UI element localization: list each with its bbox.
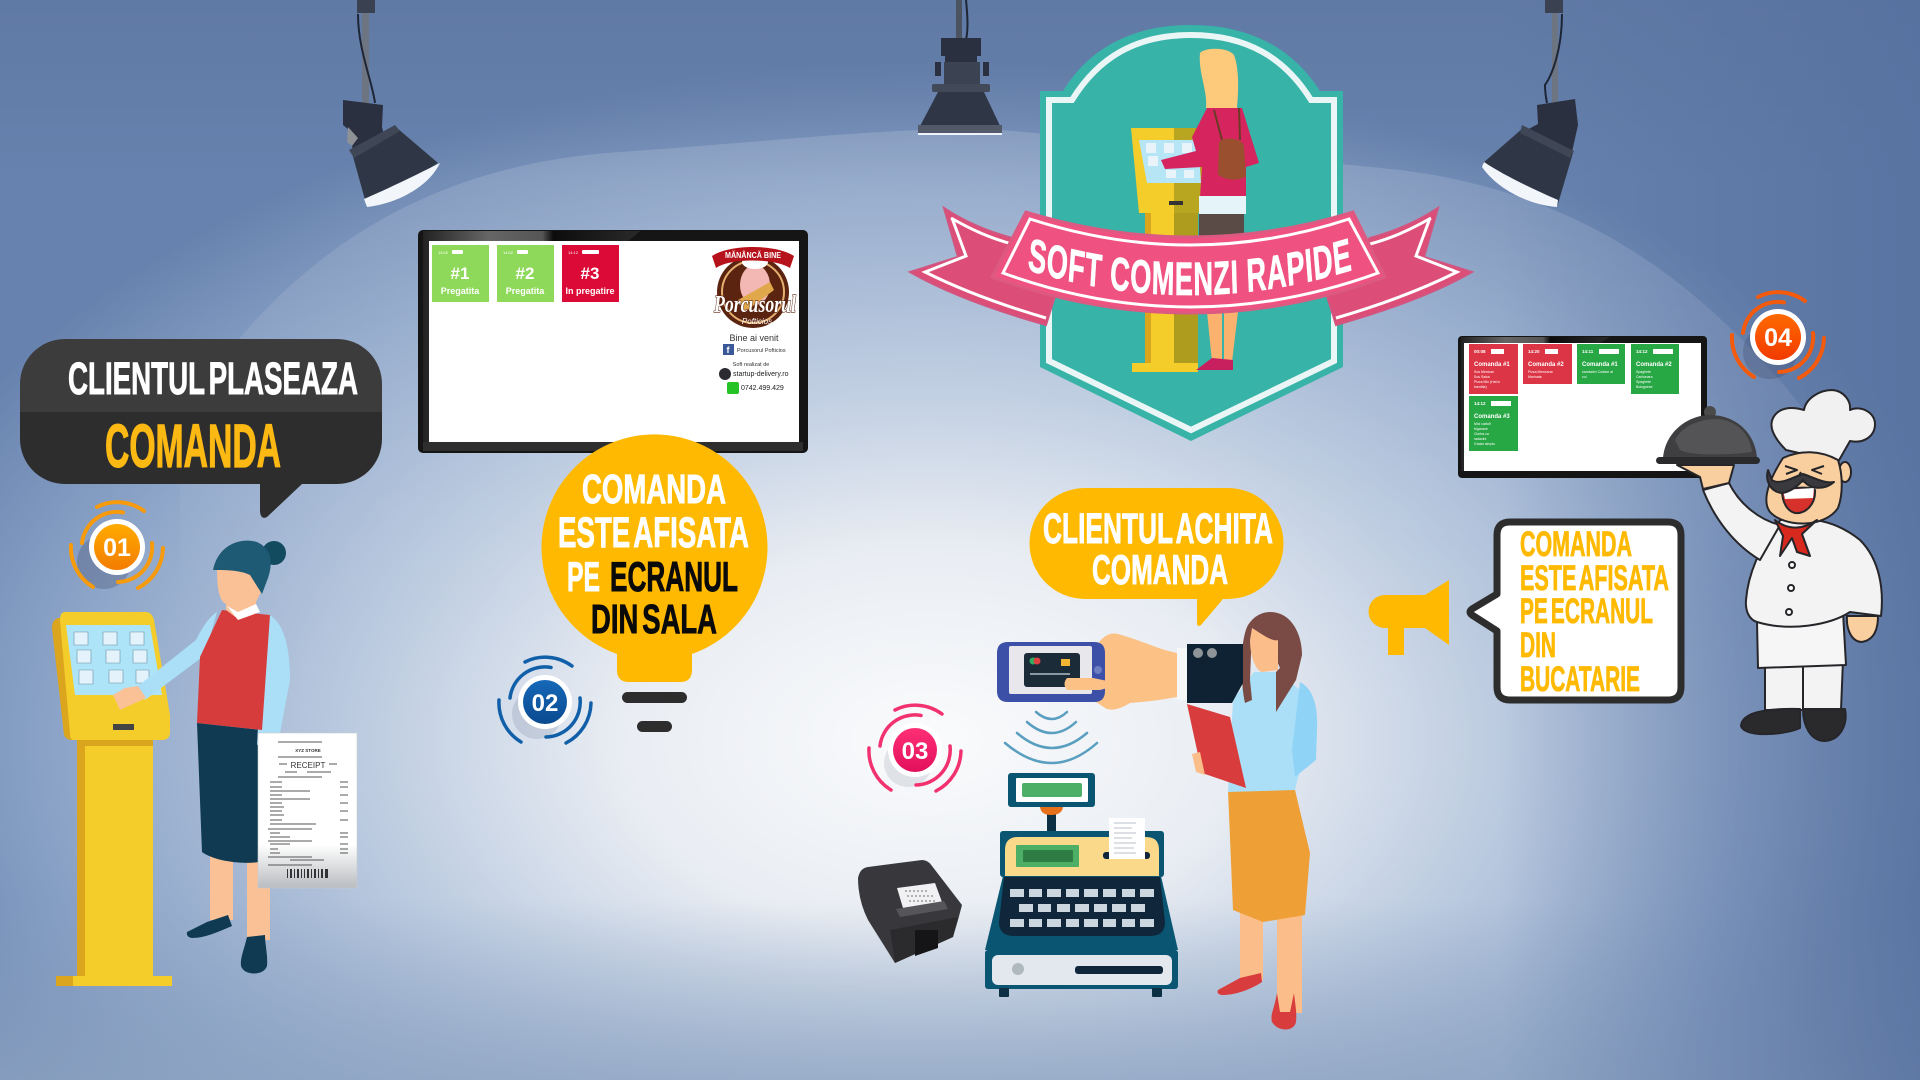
spotlight: left [343, 0, 440, 207]
mini woman from behind [1161, 49, 1259, 370]
kitchen ticket 4: Spaghete [1636, 370, 1651, 374]
lightbulb callout [542, 434, 767, 732]
bulb text [558, 466, 749, 642]
kitchen text: BUCATARIE [1520, 660, 1640, 699]
spotlight: center [918, 0, 1002, 135]
chef mustache [1767, 470, 1834, 493]
step badge 02: 02 [532, 690, 558, 717]
bulb base bars [622, 692, 687, 732]
kitchen ticket 5: Gratar simplu [1474, 442, 1495, 446]
phone [997, 642, 1105, 702]
kitchen ticket 3: sandwich Cuisine al [1582, 370, 1613, 374]
order card 3 [562, 245, 619, 302]
order card 1: #1 [451, 264, 469, 283]
kitchen ticket 2: Pizza Mexicana [1528, 370, 1553, 374]
kitchen ticket 5: Mici cartofi [1474, 422, 1491, 426]
monitor: dining room screen [418, 230, 808, 453]
kitchen ticket 3: 14:11 [1582, 349, 1594, 354]
contactless waves [1005, 712, 1097, 763]
kitchen ticket 5: Comanda #3 [1474, 414, 1510, 420]
welcome info: Porcusorul Pofticios [737, 348, 786, 354]
kitchen ticket 1: Sos Mexican [1474, 370, 1494, 374]
payment text: CLIENTUL ACHITA [1043, 505, 1273, 553]
kitchen ticket 5: radacini [1474, 437, 1486, 441]
welcome info [719, 333, 789, 394]
heading line 1: CLIENTUL PLASEAZA [68, 353, 358, 404]
receipt: XYZ STORE [295, 748, 321, 753]
kitchen ticket 5: 14:12 [1474, 401, 1486, 406]
spotlight: right [1482, 0, 1578, 207]
shield badge with title [908, 25, 1474, 441]
restaurant logo: Porcusorul [713, 292, 796, 318]
bulb text: DIN SALA [591, 596, 717, 642]
title: SOFT COMENZI RAPIDE [1028, 238, 1352, 296]
kitchen ticket 4 [1631, 344, 1679, 394]
shield background [1040, 25, 1343, 441]
order card 3: #3 [581, 264, 599, 283]
welcome info: Bine ai venit [729, 333, 779, 343]
arm holding phone [997, 634, 1243, 710]
kitchen ticket 3 [1577, 344, 1625, 384]
restaurant logo: MĂNÂNCĂ BINE [725, 251, 782, 260]
step badge 04: 04 [1764, 324, 1792, 352]
kitchen text: ESTE AFISATA [1520, 559, 1669, 598]
chef hand up [1677, 465, 1734, 489]
serving cloche [1656, 406, 1760, 464]
ribbon right tail [1322, 208, 1472, 325]
chef neckerchief [1775, 520, 1817, 556]
restaurant logo: Pofticios [742, 317, 772, 326]
step badge 04 [1732, 292, 1824, 379]
step badge 03 [869, 705, 961, 791]
monitor: kitchen screen [1458, 336, 1707, 478]
kitchen ticket 2 [1523, 344, 1572, 384]
chef jacket [1746, 520, 1882, 627]
bulb text: PE [567, 553, 600, 600]
bulb text: COMANDA [582, 466, 726, 512]
step badge 01: 01 [103, 534, 131, 562]
order card 2: #2 [516, 264, 534, 283]
bubble: client pays: COMANDA [1092, 546, 1228, 593]
kitchen ticket 4: Comanda #2 [1636, 362, 1672, 368]
chef eyes and nose [1785, 466, 1824, 482]
order card 1: Pregatita [441, 286, 480, 296]
order card 1 [432, 245, 489, 302]
cash register [985, 773, 1178, 997]
kitchen ticket 1 [1469, 344, 1518, 394]
chef hand down [1847, 616, 1878, 642]
bubble: client pays [1030, 488, 1284, 626]
kitchen text: PE ECRANUL [1520, 592, 1653, 631]
megaphone icon [1369, 580, 1449, 655]
ribbon left tail [910, 208, 1060, 325]
kitchen ticket 5 [1469, 396, 1518, 451]
order card 2 [497, 245, 554, 302]
heading line 2: COMANDA [105, 412, 281, 480]
chef head [1766, 452, 1842, 524]
order card 1: 14:02 [438, 250, 449, 255]
order card 3: In pregatire [565, 286, 615, 296]
bubble: client places order [20, 339, 382, 518]
kitchen ticket 5: Ciorba cu [1474, 432, 1489, 436]
chef raised arm [1703, 483, 1780, 560]
woman at kiosk [113, 541, 290, 974]
chef apron [1757, 612, 1846, 668]
kitchen ticket 4: Carbonara [1636, 375, 1653, 379]
step badge 03: 03 [902, 738, 928, 765]
kiosk 01 [52, 612, 172, 986]
kitchen text: COMANDA [1520, 525, 1632, 564]
kitchen ticket 5: frigarane [1474, 427, 1488, 431]
step badge 01 [71, 502, 163, 589]
kitchen ticket 1: 00:08 [1474, 349, 1486, 354]
bulb text: ECRANUL [610, 553, 738, 600]
chef mouth [1782, 488, 1815, 513]
order card 2: 14:02 [503, 250, 514, 255]
kitchen ticket 3: cui [1582, 375, 1587, 379]
kitchen ticket 1: bandita) [1474, 385, 1487, 389]
restaurant logo [712, 247, 796, 328]
kitchen text [1520, 525, 1669, 699]
woman paying [1187, 612, 1317, 1030]
kitchen ticket 4: 14:12 [1636, 349, 1648, 354]
kitchen ticket 4: Bolognese [1636, 385, 1653, 389]
kitchen ticket 3: Comanda #1 [1582, 362, 1618, 368]
order card 3: 14:12 [568, 250, 579, 255]
kitchen text: DIN [1520, 626, 1556, 665]
chef legs and shoes [1741, 660, 1846, 741]
welcome info: Soft realizat de [733, 362, 769, 368]
receipt printer [858, 860, 962, 963]
ribbon main band [992, 212, 1385, 313]
kitchen ticket 1: Comanda #1 [1474, 362, 1510, 368]
kitchen ticket 1: Sos Salsa [1474, 375, 1490, 379]
welcome info: 0742.499.429 [741, 385, 784, 392]
bulb text: ESTE AFISATA [558, 509, 749, 557]
bubble: kitchen screen [1470, 522, 1681, 700]
mini kiosk [1131, 128, 1204, 372]
chef ear [1839, 462, 1851, 482]
kitchen ticket 2: Comanda #2 [1528, 362, 1564, 368]
receipt [258, 733, 357, 888]
kitchen ticket 2: Marinata [1528, 375, 1542, 379]
kitchen ticket 1: Pizza Mix (Hat in [1474, 380, 1500, 384]
chef buttons [1786, 562, 1795, 615]
welcome info: f [726, 345, 730, 355]
receipt: RECEIPT [291, 761, 325, 770]
welcome info: startup-delivery.ro [733, 371, 789, 378]
order card 2: Pregatita [506, 286, 545, 296]
chef hat [1771, 390, 1875, 462]
chef character [1677, 390, 1882, 741]
kitchen ticket 2: 14:20 [1528, 349, 1540, 354]
step badge 02 [499, 657, 591, 743]
kitchen ticket 4: Spaghete [1636, 380, 1651, 384]
